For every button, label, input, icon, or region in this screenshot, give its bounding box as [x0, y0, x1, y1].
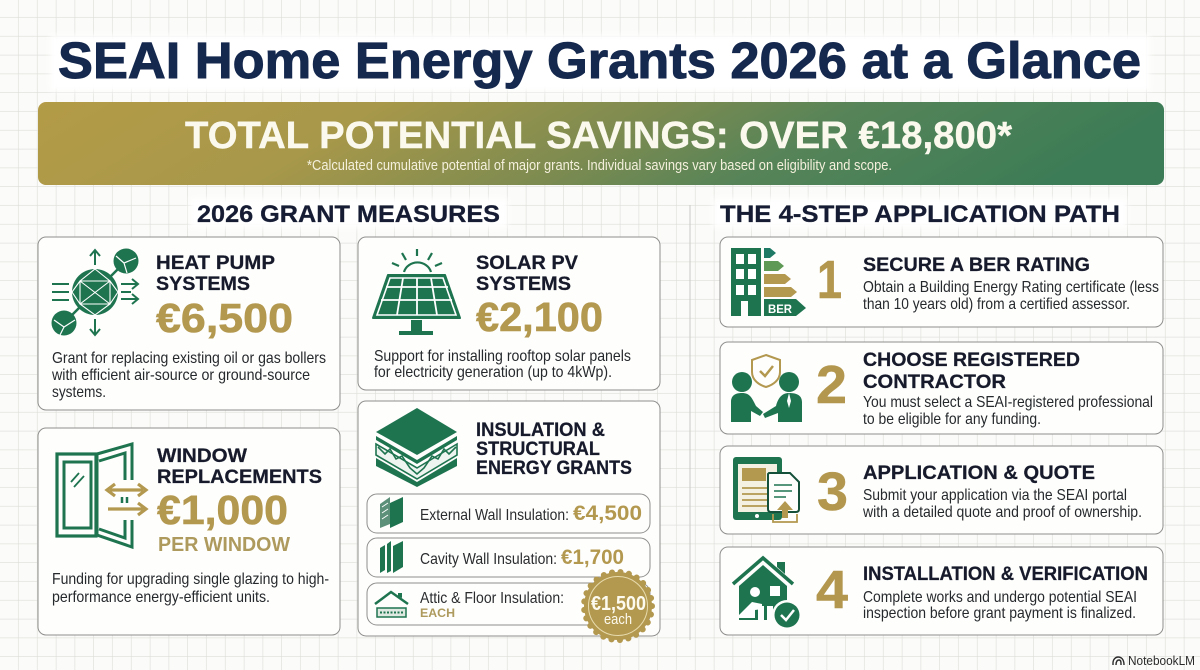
description — [863, 394, 1153, 428]
description: performance energy-efficient units. — [52, 589, 270, 606]
panel: window replacements — [38, 428, 340, 635]
description: Grant for replacing existing oil or gas bollers — [52, 350, 326, 367]
description: Funding for upgrading single glazing to high- — [52, 571, 329, 588]
number: 2 — [816, 355, 847, 415]
panel: step 1 — [720, 237, 1163, 327]
description: You must select a SEAI-registered professional — [863, 394, 1153, 411]
icon: insulation layers — [376, 408, 457, 487]
icon: BER building: BER — [768, 304, 793, 316]
description — [52, 571, 329, 606]
row: external wall insulation — [367, 494, 650, 533]
description: Submit your application via the SEAI portal — [863, 487, 1127, 504]
description: inspection before grant payment is finalized. — [863, 605, 1136, 622]
heading: SOLAR PV — [476, 252, 578, 274]
description: for electricity generation (up to 4kWp). — [374, 364, 612, 381]
panel: heat pump systems — [38, 237, 340, 410]
panel: step 3 — [720, 446, 1163, 534]
icon: attic house — [375, 592, 408, 617]
label: Cavity Wall Insulation: — [420, 551, 557, 568]
heading — [476, 252, 578, 295]
heading — [156, 252, 275, 295]
heading — [476, 419, 632, 479]
heading: SYSTEMS — [476, 273, 571, 295]
icon: external wall — [380, 497, 403, 528]
heading: SECURE A BER RATING — [863, 254, 1090, 276]
label: External Wall Insulation: — [420, 507, 569, 524]
description — [51, 350, 326, 401]
panel: insulation and structural energy grants — [358, 401, 660, 640]
badge: 1500 each: €1,500 — [591, 593, 646, 615]
amount: €1,000 — [157, 487, 288, 533]
icon: cavity wall — [380, 541, 403, 573]
description — [863, 589, 1137, 622]
heading: REPLACEMENTS — [157, 466, 322, 488]
description — [862, 487, 1142, 521]
heading: SYSTEMS — [156, 273, 250, 295]
heading — [157, 445, 322, 488]
heading: CONTRACTOR — [863, 371, 1006, 393]
amount: €4,500 — [573, 502, 642, 525]
heading: HEAT PUMP — [156, 252, 275, 274]
panel: step 4 — [720, 547, 1163, 635]
icon: handshake and shield — [731, 355, 802, 422]
icon: heat pump — [52, 248, 138, 336]
description: with efficient air-source or ground-source — [51, 367, 310, 384]
icon: window — [57, 444, 146, 547]
row: cavity wall insulation — [367, 538, 650, 577]
icon: solar panel — [373, 249, 460, 335]
panel: step 2 — [720, 342, 1163, 434]
panel: solar pv systems — [358, 237, 660, 390]
heading: INSTALLATION & VERIFICATION — [863, 563, 1148, 585]
description: Complete works and undergo potential SEAI — [863, 589, 1137, 606]
label: Attic & Floor Insulation: — [420, 590, 564, 607]
badge: 1500 each — [584, 572, 652, 640]
heading — [863, 349, 1080, 393]
number: 3 — [817, 462, 848, 522]
description: Obtain a Building Energy Rating certificate (less — [863, 279, 1159, 296]
title: SEAI Home Energy Grants 2026 at a Glance — [58, 32, 1141, 89]
description — [374, 348, 631, 381]
heading: STRUCTURAL — [476, 438, 600, 460]
heading: INSULATION & — [476, 419, 605, 441]
heading: WINDOW — [157, 445, 248, 467]
icon: tablet and document — [733, 457, 799, 522]
description: with a detailed quote and proof of ownership. — [862, 504, 1142, 521]
banner headline: TOTAL POTENTIAL SAVINGS: OVER €18,800* — [185, 115, 1012, 157]
description — [863, 279, 1159, 313]
heading: ENERGY GRANTS — [476, 457, 632, 479]
row: attic and floor insulation — [367, 583, 650, 625]
description: systems. — [52, 384, 106, 401]
icon: house with check — [733, 558, 802, 630]
per window label: PER WINDOW — [158, 534, 290, 556]
heading: grant measures: 2026 GRANT MEASURES — [197, 201, 500, 228]
description: to be eligible for any funding. — [863, 411, 1041, 428]
heading: application path: THE 4-STEP APPLICATION PATH — [720, 201, 1120, 228]
heading: APPLICATION & QUOTE — [863, 462, 1095, 484]
heading: CHOOSE REGISTERED — [863, 349, 1080, 371]
amount: €2,100 — [476, 294, 603, 340]
each label: EACH — [420, 606, 455, 620]
number: 4 — [816, 560, 848, 620]
amount: €1,700 — [561, 546, 624, 569]
amount: €6,500 — [156, 295, 293, 341]
banner footnote: *Calculated cumulative potential of major grants. Individual savings vary based on eligibility and scope. — [307, 158, 892, 174]
description: than 10 years old) from a certified assessor. — [863, 296, 1130, 313]
icon: BER building — [731, 248, 806, 316]
description: Support for installing rooftop solar panels — [374, 348, 631, 365]
number: 1 — [817, 250, 842, 310]
watermark: NotebookLM: NotebookLM — [1128, 654, 1195, 668]
banner: total potential savings — [38, 102, 1164, 185]
badge: 1500 each: each — [604, 611, 632, 628]
